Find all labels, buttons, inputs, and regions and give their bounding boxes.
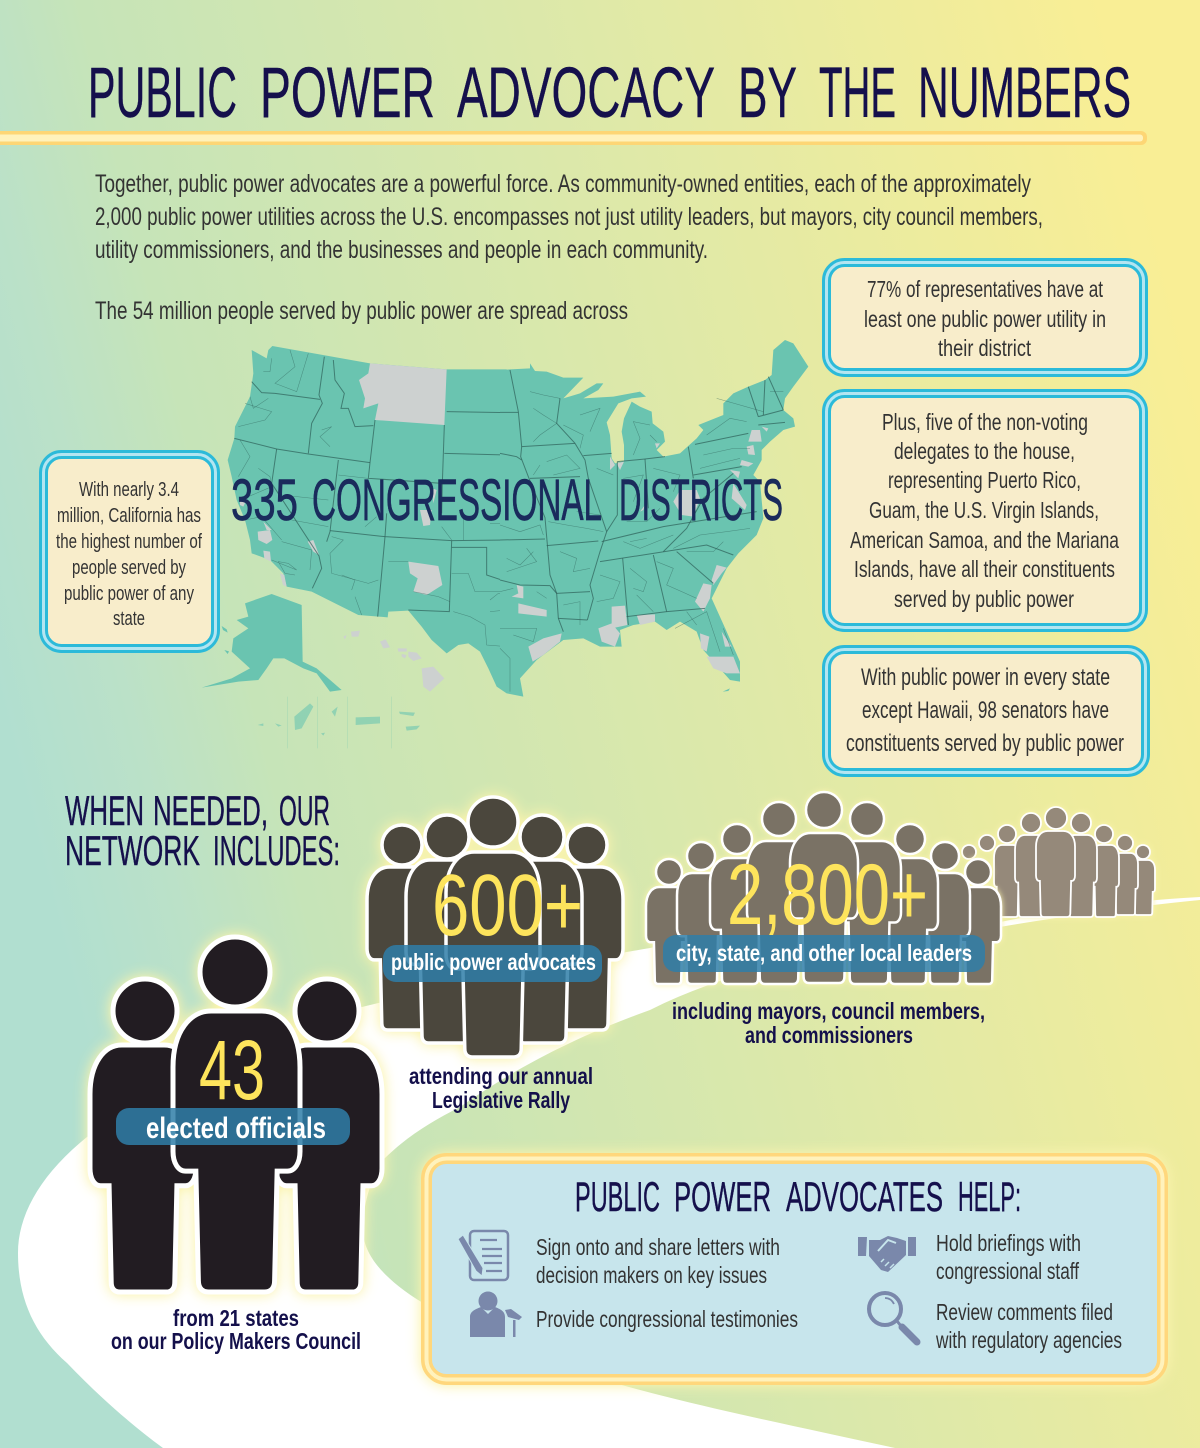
caption: policy makers council: from 21 states <box>173 1305 299 1331</box>
panel heading: HELP: <box>958 1173 1021 1220</box>
callout: California <box>44 454 216 648</box>
label pill: public power advocates: public power advocates <box>391 949 596 975</box>
title <box>88 54 1131 133</box>
network heading <box>65 787 340 874</box>
callout: non-voting delegates: served by public power <box>894 586 1074 612</box>
Alaska <box>202 594 342 692</box>
caption: legislative rally <box>409 1063 593 1113</box>
text: briefings: Hold briefings with <box>936 1230 1081 1256</box>
Hawaii <box>343 631 444 692</box>
caption: mayors and commissioners: and commissioners <box>745 1022 913 1048</box>
callout: non-voting delegates: delegates to the house, <box>894 438 1075 464</box>
stat: 600+: 600+ <box>432 857 583 954</box>
callout: California: million, California has <box>57 505 201 527</box>
territories <box>258 703 420 736</box>
stat: 2,800+: 2,800+ <box>727 847 928 943</box>
network heading: INCLUDES: <box>213 827 340 874</box>
western half of map <box>202 346 507 748</box>
title: PUBLIC <box>88 54 237 133</box>
label pill: city, state, and other local leaders <box>663 935 985 972</box>
callout: senators <box>826 650 1146 772</box>
panel heading: PUBLIC <box>575 1173 660 1220</box>
callout: senators: except Hawaii, 98 senators have <box>862 697 1109 724</box>
callout: non-voting delegates: Islands, have all their constituents <box>854 556 1115 582</box>
text: sign onto letters: Sign onto and share letters with <box>536 1234 780 1260</box>
people group: 2,800+ leaders <box>646 792 1001 984</box>
callout: non-voting delegates: American Samoa, and the Mariana <box>850 527 1119 553</box>
US congressional districts map <box>202 340 808 748</box>
callout: California: people served by <box>72 557 186 579</box>
callout: non-voting delegates: representing Puerto Rico, <box>888 467 1081 493</box>
callout: California: public power of any <box>64 583 194 605</box>
map heading: 335 congressional districts: 335 <box>231 468 298 533</box>
title underline bar <box>0 131 1147 145</box>
caption: policy makers council: on our Policy Makers Council <box>111 1328 361 1354</box>
label pill: public power advocates <box>383 945 602 982</box>
map heading: 335 congressional districts: DISTRICTS <box>619 468 783 533</box>
text: review comments: Review comments filed <box>936 1299 1113 1325</box>
callout: non-voting delegates: Plus, five of the non-voting <box>882 409 1088 435</box>
label pill: elected officials: elected officials <box>146 1112 326 1145</box>
callout: senators: With public power in every state <box>861 664 1110 691</box>
caption: legislative rally: Legislative Rally <box>432 1087 570 1113</box>
network heading: OUR <box>279 787 330 834</box>
icon: speaker at microphone <box>470 1292 522 1337</box>
callout: non-voting delegates <box>826 394 1144 628</box>
callout: 77% of representatives: 77% of representatives have at <box>867 276 1103 302</box>
panel heading <box>575 1173 1021 1220</box>
panel heading: ADVOCATES <box>786 1173 943 1220</box>
callout: 77% of representatives: least one public power utility in <box>864 306 1106 332</box>
network heading: WHEN <box>65 787 144 834</box>
text: briefings: congressional staff <box>936 1258 1079 1284</box>
intro text: The 54 million people served by public power are spread across <box>95 297 628 325</box>
callout: non-voting delegates: Guam, the U.S. Virgin Islands, <box>869 497 1099 523</box>
eastern half of map <box>500 340 808 697</box>
icon: letter and pen <box>458 1231 508 1280</box>
people group: back row, distant <box>962 807 1155 917</box>
callout: California: With nearly 3.4 <box>79 479 179 501</box>
icon: magnifying glass <box>869 1293 917 1342</box>
panel heading: POWER <box>674 1173 771 1220</box>
stat: 43: 43 <box>199 1023 265 1117</box>
caption: mayors and commissioners <box>672 998 985 1048</box>
network heading: NEEDED, <box>153 787 268 834</box>
icon: handshake <box>858 1236 916 1272</box>
callout: California: the highest number of <box>56 531 202 553</box>
label pill: city, state, and other local leaders: city, state, and other local leaders <box>676 940 972 966</box>
text: briefings <box>936 1230 1081 1284</box>
white swoosh <box>18 897 1200 1448</box>
intro text: utility commissioners, and the businesses and people in each community. <box>95 236 708 264</box>
territory dividers <box>288 697 392 748</box>
network heading: NETWORK <box>65 827 200 874</box>
map heading: 335 congressional districts: CONGRESSIONAL <box>312 468 602 533</box>
panel frame <box>426 1158 1162 1380</box>
panel: public power advocates help <box>426 1158 1162 1380</box>
callout: California: state <box>113 608 145 630</box>
text: review comments: with regulatory agencies <box>935 1327 1122 1353</box>
caption: mayors and commissioners: including mayors, council members, <box>672 998 985 1024</box>
intro text <box>95 170 1043 325</box>
text: testimonies: Provide congressional testimonies <box>536 1306 798 1332</box>
title: ADVOCACY <box>457 54 715 133</box>
caption: policy makers council <box>111 1305 361 1354</box>
text: sign onto letters: decision makers on key issues <box>536 1262 767 1288</box>
title: POWER <box>260 54 435 133</box>
text: review comments <box>935 1299 1122 1353</box>
callout: 77% of representatives <box>826 262 1144 372</box>
title: BY <box>738 54 797 133</box>
callout: 77% of representatives: their district <box>938 335 1031 361</box>
people group: 600+ advocates <box>367 797 623 1057</box>
caption: legislative rally: attending our annual <box>409 1063 593 1089</box>
people group: 43 elected officials <box>90 937 382 1292</box>
title: THE <box>819 54 896 133</box>
Alaska islands <box>222 626 229 654</box>
text: sign onto letters <box>536 1234 780 1288</box>
